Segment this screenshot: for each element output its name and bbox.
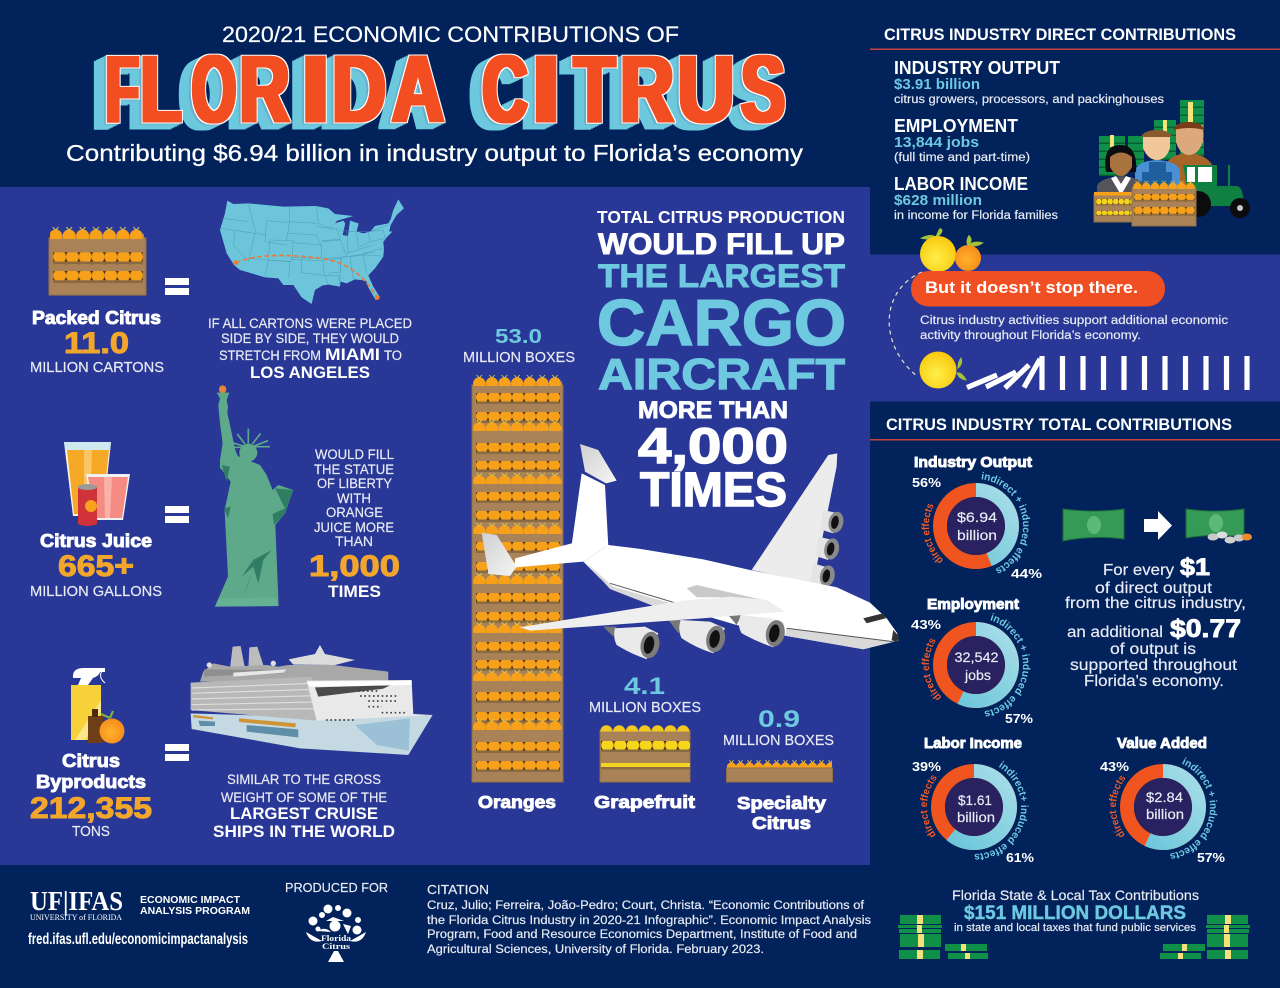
donut: labor income: billion	[957, 809, 995, 825]
text: additional activity: activity throughout Florida’s economy.	[920, 330, 1141, 342]
metric: industry output	[894, 58, 1164, 106]
panel: citrus byproducts	[30, 645, 433, 841]
number: 4.1 million boxes	[589, 673, 701, 716]
donut: value added: 43%	[1100, 759, 1129, 774]
illustration: cargo aircraft	[482, 444, 899, 660]
number: 212,355: 212,355	[30, 792, 152, 825]
number: 0.9 million boxes	[723, 706, 834, 749]
label: citrus byproducts: Citrus	[62, 751, 120, 771]
number: 4.1 million boxes: MILLION BOXES	[589, 700, 701, 716]
text: cartons comparison	[208, 316, 412, 382]
chart: specialty citrus boxes	[723, 706, 834, 833]
text: statue comparison: TIMES	[328, 582, 381, 601]
donut: labor income: 39%	[912, 759, 941, 774]
panel: citrus juice	[30, 385, 400, 607]
logo: UF IFAS: UF|IFAS	[30, 886, 123, 916]
label: citrus byproducts	[36, 751, 146, 792]
label: packed citrus: Packed Citrus	[32, 308, 161, 328]
donut: employment: Employment	[927, 597, 1019, 613]
donut: industry output: $6.94	[957, 509, 997, 525]
program name: ECONOMIC IMPACT	[140, 895, 240, 906]
text: multiplier explanation: of direct output	[1095, 580, 1213, 597]
callout pill: But it doesn’t stop there.	[925, 278, 1138, 297]
metric: industry output: citrus growers, processors, and packinghouses	[894, 94, 1164, 106]
equals sign	[165, 744, 189, 761]
logo: Florida Citrus tree: Citrus	[322, 942, 350, 951]
donut: employment: 57%	[1005, 711, 1033, 726]
panel: left production panel background	[0, 187, 870, 865]
icon: carton of oranges	[49, 227, 146, 295]
title: overline: 2020/21 ECONOMIC CONTRIBUTIONS OF	[222, 22, 679, 47]
heading: direct contributions: CITRUS INDUSTRY DIRECT CONTRIBUTIONS	[884, 26, 1236, 44]
label: specialty citrus: Specialty	[737, 793, 826, 813]
text: multiplier explanation: Florida's economy.	[1084, 673, 1224, 690]
donut: industry output	[912, 455, 1043, 581]
panel: but it doesn't stop there	[870, 229, 1280, 402]
stack of orange crates	[472, 374, 563, 782]
text: multiplier explanation: supported throughout	[1070, 657, 1238, 674]
panel: total contributions	[870, 416, 1280, 959]
title: Florida Citrus: R	[240, 36, 290, 143]
text: cruise comparison: SHIPS IN THE WORLD	[213, 822, 395, 841]
text: statue comparison: 1,000	[309, 550, 400, 583]
text: multiplier explanation: of output is	[1110, 641, 1196, 658]
donut: employment: jobs	[964, 667, 991, 683]
metric: employment	[894, 116, 1030, 164]
title: Florida Citrus: L	[140, 36, 182, 143]
headline: total citrus production	[597, 207, 846, 517]
logo: Florida Citrus tree: Florida	[321, 934, 351, 943]
headline: total citrus production: TOTAL CITRUS PRODUCTION	[597, 207, 845, 227]
title: Florida Citrus: D	[332, 36, 386, 143]
donut: value added: $2.84	[1146, 789, 1183, 805]
illustration: Statue of Liberty	[215, 385, 293, 607]
title: Florida Citrus: F	[106, 36, 139, 143]
title: Florida Citrus: O	[192, 36, 236, 143]
headline: total citrus production: WOULD FILL UP	[598, 228, 845, 261]
title: Florida Citrus: U	[678, 36, 734, 143]
icon: spray bottle, brown bottle and orange	[71, 668, 124, 744]
icon: left money stacks	[898, 915, 988, 959]
specialty crate	[726, 759, 832, 782]
text: cartons comparison: TO	[384, 348, 402, 363]
logo: Florida Citrus tree	[306, 904, 366, 962]
label: citrus juice: Citrus Juice	[40, 531, 152, 551]
headline: total citrus production: TIMES	[640, 464, 787, 517]
number: 0.9 million boxes: 0.9	[758, 706, 800, 733]
unit: million cartons: MILLION CARTONS	[30, 360, 164, 376]
icon: falling dominos	[967, 356, 1247, 390]
heading: total contributions: CITRUS INDUSTRY TOTAL CONTRIBUTIONS	[886, 416, 1232, 434]
label: citrus byproducts: Byproducts	[36, 772, 146, 792]
text: cartons comparison: IF ALL CARTONS WERE PLACED	[208, 316, 412, 331]
chart: grapefruit boxes	[589, 673, 701, 812]
title: Florida Citrus: C	[482, 36, 528, 143]
donut: value added	[1100, 736, 1225, 865]
equals sign	[165, 278, 189, 295]
illustration: workers, money, tractor and crates	[1094, 100, 1250, 226]
text: multiplier explanation: $0.77	[1170, 615, 1241, 643]
text: statue comparison: THAN	[335, 534, 373, 549]
text: state and local tax contributions: in state and local taxes that fund public services	[954, 922, 1197, 934]
citation: Program, Food and Resource Economics Department, Institute of Food and	[427, 929, 857, 941]
text: multiplier explanation: an additional	[1067, 624, 1163, 641]
text: cruise comparison: WEIGHT OF SOME OF THE	[221, 790, 387, 805]
citation: CITATION	[427, 882, 489, 897]
dashed path from citrus to citrus	[889, 272, 922, 377]
icon: dollar bill	[1063, 509, 1124, 541]
text: cruise comparison: SIMILAR TO THE GROSS	[227, 772, 381, 787]
text: cruise comparison: LARGEST CRUISE	[230, 804, 378, 823]
citation	[427, 882, 871, 956]
panel: packed citrus	[30, 199, 412, 382]
text: statue comparison: OF LIBERTY	[317, 476, 392, 491]
donut: labor income: $1.61	[958, 792, 992, 808]
callout pill	[911, 271, 1165, 306]
donut: labor income: indirect+ induced effects	[974, 760, 1029, 860]
text: statue comparison: JUICE MORE	[314, 520, 394, 535]
text: multiplier explanation: $1	[1180, 554, 1210, 581]
text: state and local tax contributions	[952, 887, 1199, 934]
panel: direct contributions	[870, 26, 1280, 226]
donut: employment: indirect + induced effects	[984, 613, 1030, 716]
donut: labor income: direct effects	[920, 775, 936, 838]
headline: total citrus production: CARGO	[597, 286, 846, 359]
citation: the Florida Citrus Industry in 2020-21 Infographic”. Economic Impact Analysis	[427, 915, 871, 927]
title: Florida Citrus: I	[300, 36, 330, 143]
metric: industry output: INDUSTRY OUTPUT	[894, 58, 1060, 78]
donut: labor income: Labor Income	[924, 736, 1022, 752]
text: state and local tax contributions: Florida State & Local Tax Contributions	[952, 887, 1199, 903]
donut: employment: direct effects	[921, 638, 941, 700]
title: Florida Citrus: I	[531, 36, 561, 143]
label: oranges: Oranges	[478, 792, 556, 812]
footer	[28, 880, 871, 962]
equals sign	[165, 506, 189, 523]
text: statue comparison: ORANGE	[326, 505, 383, 520]
text: statue comparison	[309, 447, 400, 601]
text: cruise comparison	[213, 772, 395, 841]
donut: labor income: 61%	[1006, 850, 1034, 865]
text: statue comparison: WITH	[337, 491, 371, 506]
number: 4.1 million boxes: 4.1	[624, 673, 665, 700]
chart: orange box stack	[463, 326, 575, 812]
citation: Cruz, Julio; Ferreira, João-Pedro; Court, Christa. “Economic Contributions of	[427, 900, 865, 912]
text: statue comparison: WOULD FILL	[315, 447, 394, 462]
title: Florida Citrus: A	[392, 36, 444, 143]
donut: employment: 43%	[911, 617, 941, 632]
donut: value added: direct effects	[1109, 776, 1126, 838]
icon: grapefruit and orange	[920, 229, 982, 272]
title: Florida Citrus: R	[620, 36, 674, 143]
donut: labor income	[912, 736, 1034, 865]
text: state and local tax contributions: $151 MILLION DOLLARS	[964, 903, 1186, 924]
metric: labor income: LABOR INCOME	[894, 174, 1028, 194]
illustration: cruise ship	[191, 645, 433, 755]
map: United States with Miami to Los Angeles route	[220, 199, 404, 304]
metric: industry output: $3.91 billion	[894, 77, 980, 93]
metric: labor income: $628 million	[894, 193, 982, 209]
metric: labor income	[894, 174, 1058, 222]
headline: total citrus production: 4,000	[638, 418, 788, 474]
donut: industry output: indirect + induced effects	[982, 472, 1030, 574]
headline: total citrus production: AIRCRAFT	[598, 350, 845, 399]
donut: value added: indirect + induced effects	[1170, 757, 1218, 859]
number: 665+: 665+	[58, 550, 134, 583]
headline: total citrus production: THE LARGEST	[598, 258, 845, 294]
text: cartons comparison: LOS ANGELES	[250, 363, 370, 382]
grapefruit crate	[600, 724, 690, 782]
donut: value added: Value Added	[1117, 736, 1207, 752]
text: cartons comparison: MIAMI	[325, 345, 380, 364]
donut: industry output: direct effects	[921, 504, 943, 563]
title block	[66, 22, 803, 166]
program name	[140, 895, 250, 917]
text: additional activity: Citrus industry activities support additional economic	[920, 315, 1228, 327]
label: specialty citrus	[737, 793, 826, 833]
icon: juice glasses and can	[64, 442, 130, 526]
unit: million gallons: MILLION GALLONS	[30, 584, 162, 600]
donut: value added: 57%	[1197, 850, 1225, 865]
icon: dollar bill with coins	[1186, 509, 1252, 544]
donut: employment	[911, 597, 1033, 726]
metric: labor income: in income for Florida families	[894, 210, 1058, 222]
label: grapefruit: Grapefruit	[594, 792, 695, 812]
metric: employment: 13,844 jobs	[894, 135, 979, 151]
donut: value added: billion	[1146, 806, 1184, 822]
arrow: bill to bill plus coins	[1144, 511, 1172, 540]
text: multiplier explanation: from the citrus industry,	[1065, 595, 1246, 612]
metric: employment: (full time and part-time)	[894, 152, 1030, 164]
logo: UF IFAS: UNIVERSITY of FLORIDA	[30, 913, 122, 922]
title: Florida Citrus: S	[741, 36, 785, 143]
headline: total citrus production: MORE THAN	[638, 397, 788, 424]
donut: industry output: billion	[957, 527, 997, 543]
number: 53.0 million boxes: MILLION BOXES	[463, 350, 575, 366]
number: 11.0: 11.0	[64, 327, 129, 360]
number: 53.0 million boxes: 53.0	[495, 326, 542, 348]
number: 0.9 million boxes: MILLION BOXES	[723, 733, 834, 749]
website: fred.ifas.ufl.edu/economicimpactanalysis	[28, 931, 248, 948]
text: additional activity	[920, 315, 1228, 342]
text: cartons comparison: SIDE BY SIDE, THEY WOULD	[221, 331, 399, 346]
text: cartons comparison: STRETCH FROM	[219, 348, 321, 363]
label: specialty citrus: Citrus	[752, 813, 811, 833]
text: statue comparison: THE STATUE	[314, 462, 394, 477]
icon: rolling lemon	[920, 352, 966, 388]
donut: employment: 32,542	[954, 649, 999, 665]
citation: Agricultural Sciences, University of Florida. February 2023.	[427, 944, 764, 956]
donut: industry output: 44%	[1011, 566, 1043, 581]
produced for: PRODUCED FOR	[285, 880, 388, 895]
icon: right money stacks	[1160, 915, 1250, 959]
text: multiplier explanation	[1065, 554, 1246, 690]
donut: industry output: 56%	[912, 475, 941, 490]
title: Florida Citrus: T	[574, 36, 615, 143]
subtitle: Contributing $6.94 billion in industry output to Florida’s economy	[66, 140, 803, 166]
donut: industry output: Industry Output	[914, 455, 1032, 471]
metric: employment: EMPLOYMENT	[894, 116, 1018, 136]
unit: tons: TONS	[72, 824, 110, 840]
program name: ANALYSIS PROGRAM	[140, 906, 250, 917]
title: Florida Citrus	[106, 36, 785, 143]
text: multiplier explanation: For every	[1103, 562, 1174, 579]
number: 53.0 million boxes	[463, 326, 575, 366]
